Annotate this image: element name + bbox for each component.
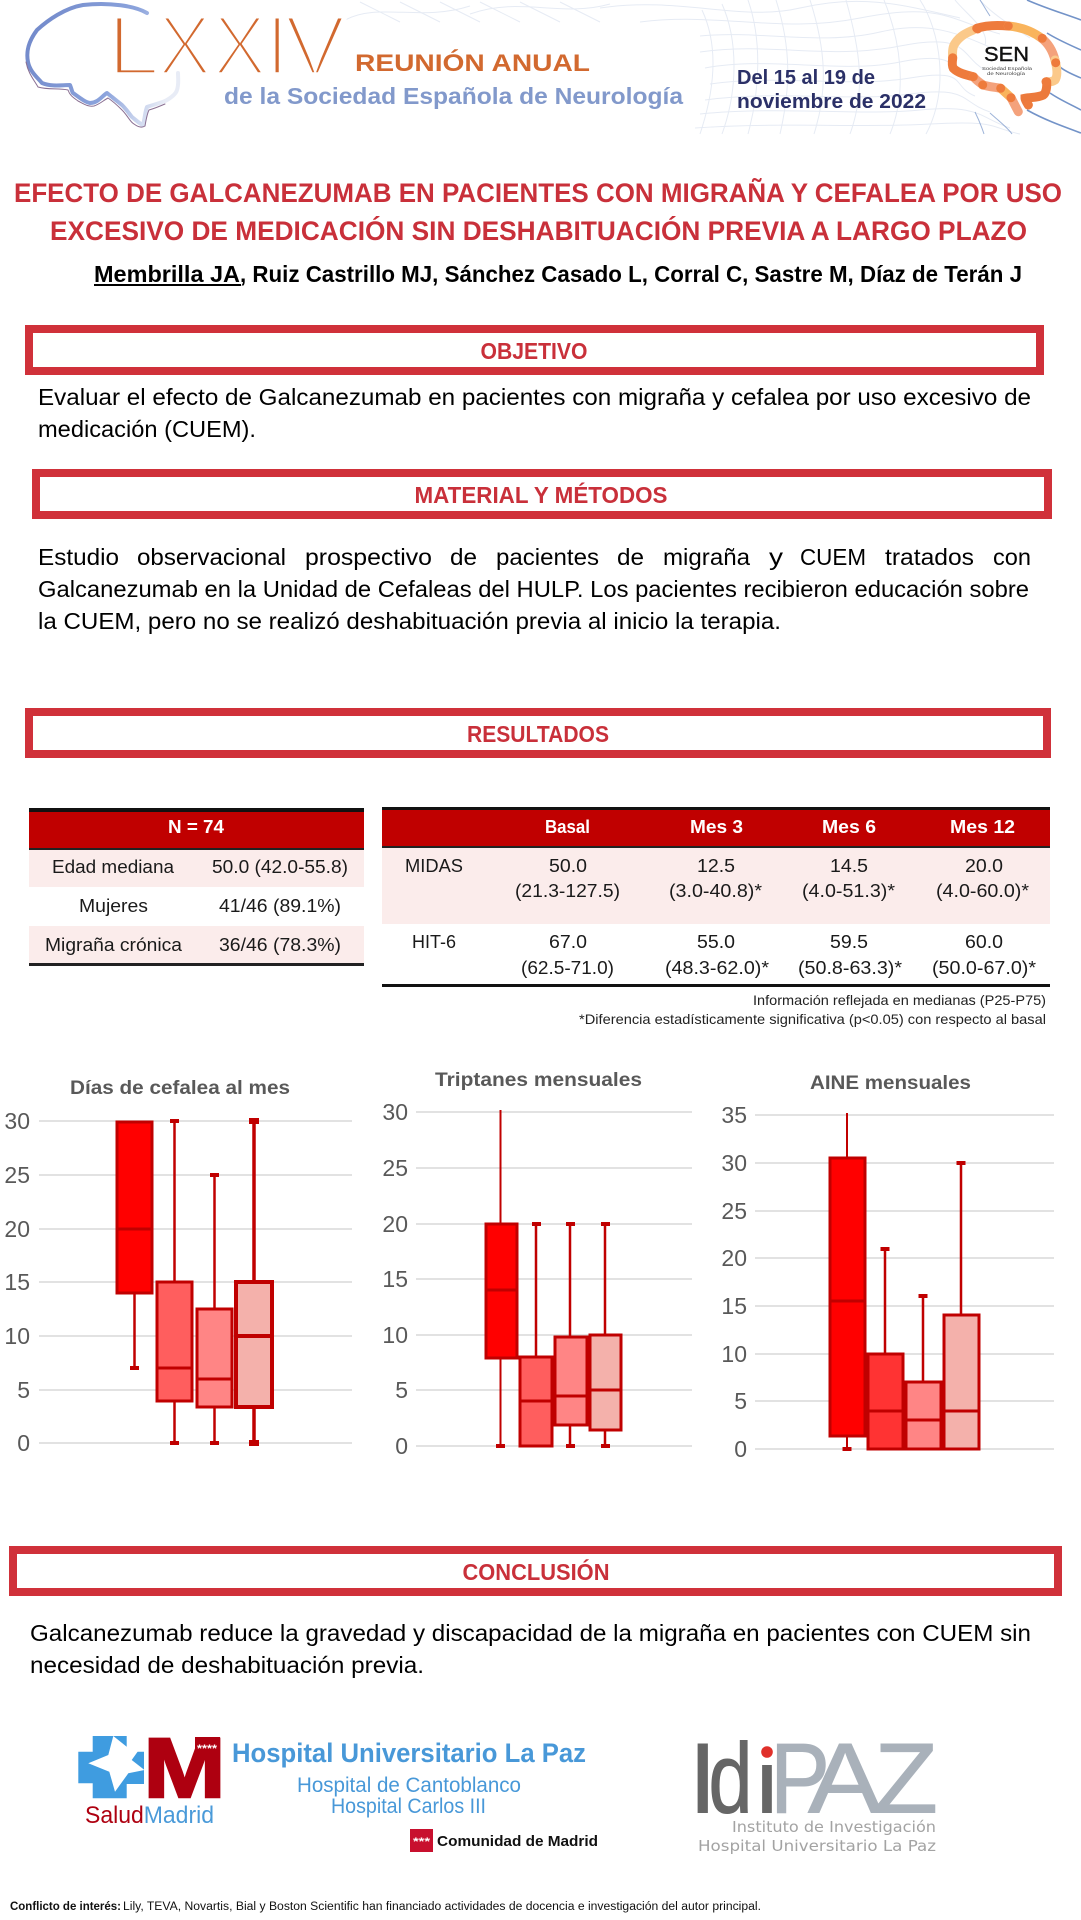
logo: IdiPAZ: P [770,1722,830,1834]
table: demographics: Migraña crónica [45,935,183,955]
LXXIV numeral: L [107,0,160,92]
text: conclusión [30,1620,1031,1678]
chart: AINE mensuales: 30 [721,1150,747,1176]
icon: brain outline [26,4,178,127]
box: mes 3 [868,1247,903,1449]
panel: resultados heading [29,712,1047,754]
panel: objetivo heading [29,329,1040,371]
panel: conclusión heading [13,1550,1058,1592]
table: outcomes: (4.0-51.3)* [802,881,895,901]
hospital names: Hospital Universitario La Paz [232,1738,586,1768]
panel: material y métodos heading [36,473,1048,515]
table: outcomes: 59.5 [830,932,868,952]
chart: AINE mensuales: 25 [721,1198,747,1224]
text: material y métodos [38,544,1031,634]
box: mes 12 [944,1161,979,1449]
text: material y métodos: Estudio [38,544,119,570]
box: mes 12 [590,1222,621,1448]
Comunidad de Madrid mark [410,1829,598,1852]
box: mes 12 [236,1118,272,1446]
chart: AINE mensuales: 15 [721,1293,747,1319]
table: demographics: 36/46 (78.3%) [219,935,341,955]
SaludMadrid wordmark: SaludMadrid [85,1802,214,1829]
logo: IdiPAZ: I [689,1722,716,1834]
text: conclusión: necesidad de deshabituación previa. [30,1652,424,1678]
box: basal [117,1122,152,1370]
wave pattern background [345,0,1081,134]
footer: conflicto de interés: Lily, TEVA, Novartis, Bial y Boston Scientific han financiado actividades de docencia e investigación del autor principal. [123,1901,761,1913]
table: outcomes: 67.0 [549,932,587,952]
LXXIV numeral: X [158,0,212,92]
chart: AINE mensuales: 20 [721,1245,747,1271]
table: outcomes: HIT-6 [412,932,456,952]
event dates: noviembre de 2022 [737,91,926,113]
table: demographics: 41/46 (89.1%) [219,896,341,916]
table: outcomes: Mes 3 [690,817,743,837]
box: mes 6 [906,1294,941,1449]
icon: SEN logo: Sociedad Española [982,66,1033,71]
hospital names: Hospital de Cantoblanco [297,1774,521,1797]
chart: Días de cefalea al mes: 5 [17,1377,30,1403]
logo: IdiPAZ: Instituto de Investigación [732,1818,936,1836]
chart: Triptanes mensuales: 20 [382,1211,408,1237]
chart: AINE mensuales: 5 [734,1388,747,1414]
table: outcomes: 14.5 [830,856,868,876]
chart: Días de cefalea al mes: 25 [4,1162,30,1188]
table: outcomes [382,807,1050,987]
box: mes 6 [197,1173,232,1445]
subheading: Sociedad: de la Sociedad Española de Neurología [224,83,683,109]
chart: Días de cefalea al mes [4,1078,352,1456]
table: outcomes: (3.0-40.8)* [669,881,762,901]
chart: Triptanes mensuales: Triptanes mensuales [435,1070,642,1091]
table: demographics: N = 74 [168,817,224,837]
table: outcomes: 20.0 [965,856,1003,876]
text: objetivo: Evaluar el efecto de Galcanezumab en pacientes con migraña y cefalea por uso excesivo de [38,384,1031,410]
text: material y métodos: prospectivo [305,544,432,570]
chart: Días de cefalea al mes: 0 [17,1430,30,1456]
table: outcomes: Mes 12 [950,817,1015,837]
text: material y métodos: observacional [137,544,286,570]
title: EFECTO DE GALCANEZUMAB EN PACIENTES CON MIGRAÑA Y CEFALEA POR USO [14,177,1062,208]
heading: Reunión Anual: REUNIÓN ANUAL [355,49,590,77]
event dates: Del 15 al 19 de [737,67,875,89]
chart: Triptanes mensuales [382,1070,692,1459]
logo: IdiPAZ [689,1722,938,1855]
table: demographics: 50.0 (42.0-55.8) [212,857,348,877]
chart: Triptanes mensuales: 25 [382,1155,408,1181]
header banner [26,0,1081,134]
table: outcomes: 60.0 [965,932,1003,952]
chart: Días de cefalea al mes: 20 [4,1216,30,1242]
text: conclusión: Galcanezumab reduce la gravedad y discapacidad de la migraña en pacientes con CUEM sin [30,1620,1031,1646]
Comunidad de Madrid mark: Comunidad de Madrid [437,1833,598,1850]
icon: red M: M [144,1721,226,1815]
chart: Días de cefalea al mes: Días de cefalea al mes [70,1078,290,1099]
table: demographics [29,808,364,966]
table: demographics: Mujeres [79,896,148,916]
table: outcomes: MIDAS [405,856,463,876]
text: material y métodos: CUEM [800,544,866,570]
logo: IdiPAZ: Hospital Universitario La Paz [698,1837,936,1855]
chart: Días de cefalea al mes: 30 [4,1108,30,1134]
logo: IdiPAZ: d [708,1722,752,1834]
logo: Hospital La Paz [78,1721,598,1852]
text: material y métodos: tratados [885,544,974,570]
table: demographics: Edad mediana [52,857,175,877]
table: outcomes: (21.3-127.5) [515,881,620,901]
footer: conflicto de interés: Conflicto de interés: [10,1901,121,1913]
table: outcomes: Basal [545,817,590,837]
LXXIV numeral: X [213,0,267,92]
text: objetivo [38,384,1031,442]
table: outcomes: Mes 6 [822,817,876,837]
chart: AINE mensuales: AINE mensuales [810,1073,971,1094]
text: material y métodos: Galcanezumab en la Unidad de Cefaleas del HULP. Los pacientes recibieron educación sobre [38,576,1029,602]
table notes: *Diferencia estadísticamente significativa (p<0.05) con respecto al basal [579,1011,1046,1027]
panel: objetivo heading: OBJETIVO [480,338,588,364]
table: outcomes: 50.0 [549,856,587,876]
hospital names: Hospital Carlos III [331,1795,486,1818]
panel: conclusión heading: CONCLUSIÓN [462,1558,610,1585]
LXXIV numeral: V [285,0,346,92]
logo: IdiPAZ: A [808,1722,882,1834]
logo: IdiPAZ: Z [874,1722,938,1834]
chart: Triptanes mensuales: 0 [395,1433,408,1459]
chart: Días de cefalea al mes: 15 [4,1269,30,1295]
chart: Triptanes mensuales: 10 [382,1322,408,1348]
box: mes 3 [520,1222,552,1446]
title [14,177,1062,246]
table: outcomes: 12.5 [697,856,735,876]
chart: AINE mensuales: 35 [721,1102,747,1128]
box: basal [830,1113,865,1451]
table notes: Información reflejada en medianas (P25-P75) [753,992,1046,1008]
table: outcomes: (4.0-60.0)* [936,881,1029,901]
icon: SEN logo: SEN [984,44,1029,66]
authors: Membrilla JA [94,261,240,287]
Comunidad de Madrid mark: *** [413,1836,431,1848]
text: objetivo: medicación (CUEM). [38,416,256,442]
text: material y métodos: de [450,544,477,570]
icon: blue cross with star [78,1736,144,1798]
text: material y métodos: de [617,544,644,570]
table: outcomes: (62.5-71.0) [521,958,614,978]
chart: Días de cefalea al mes: 10 [4,1323,30,1349]
table: outcomes: (50.8-63.3)* [798,958,902,978]
chart: Triptanes mensuales: 15 [382,1266,408,1292]
table: outcomes: (48.3-62.0)* [665,958,769,978]
hospital names [232,1738,586,1818]
authors: , Ruiz Castrillo MJ, Sánchez Casado L, Corral C, Sastre M, Díaz de Terán J [240,261,1022,287]
LXXIV numeral: I [266,0,289,92]
icon: SEN logo [948,22,1060,112]
icon: SEN logo: de Neurología [987,71,1026,76]
event dates [737,67,926,113]
chart: Triptanes mensuales: 5 [395,1377,408,1403]
LXXIV numeral [107,0,346,92]
chart: Triptanes mensuales: 30 [382,1099,408,1125]
box: mes 3 [157,1119,192,1445]
panel: resultados heading: RESULTADOS [467,721,609,747]
panel: material y métodos heading: MATERIAL Y MÉTODOS [414,481,668,508]
text: material y métodos: pacientes [496,544,599,570]
title: EXCESIVO DE MEDICACIÓN SIN DESHABITUACIÓN PREVIA A LARGO PLAZO [50,215,1027,246]
icon: red M: **** [197,1743,218,1755]
text: material y métodos: migraña [663,544,750,570]
text: material y métodos: y [769,544,784,570]
text: material y métodos: la CUEM, pero no se realizó deshabituación previa al inicio la terapia. [38,608,781,634]
chart: AINE mensuales [721,1073,1054,1462]
logo: IdiPAZ: i [756,1722,778,1834]
box: mes 6 [555,1222,587,1448]
chart: AINE mensuales: 0 [734,1436,747,1462]
table notes [579,992,1046,1027]
chart: AINE mensuales: 10 [721,1341,747,1367]
text: material y métodos: con [993,544,1031,570]
table: outcomes: 55.0 [697,932,735,952]
box: basal [486,1110,517,1448]
table: outcomes: (50.0-67.0)* [932,958,1036,978]
